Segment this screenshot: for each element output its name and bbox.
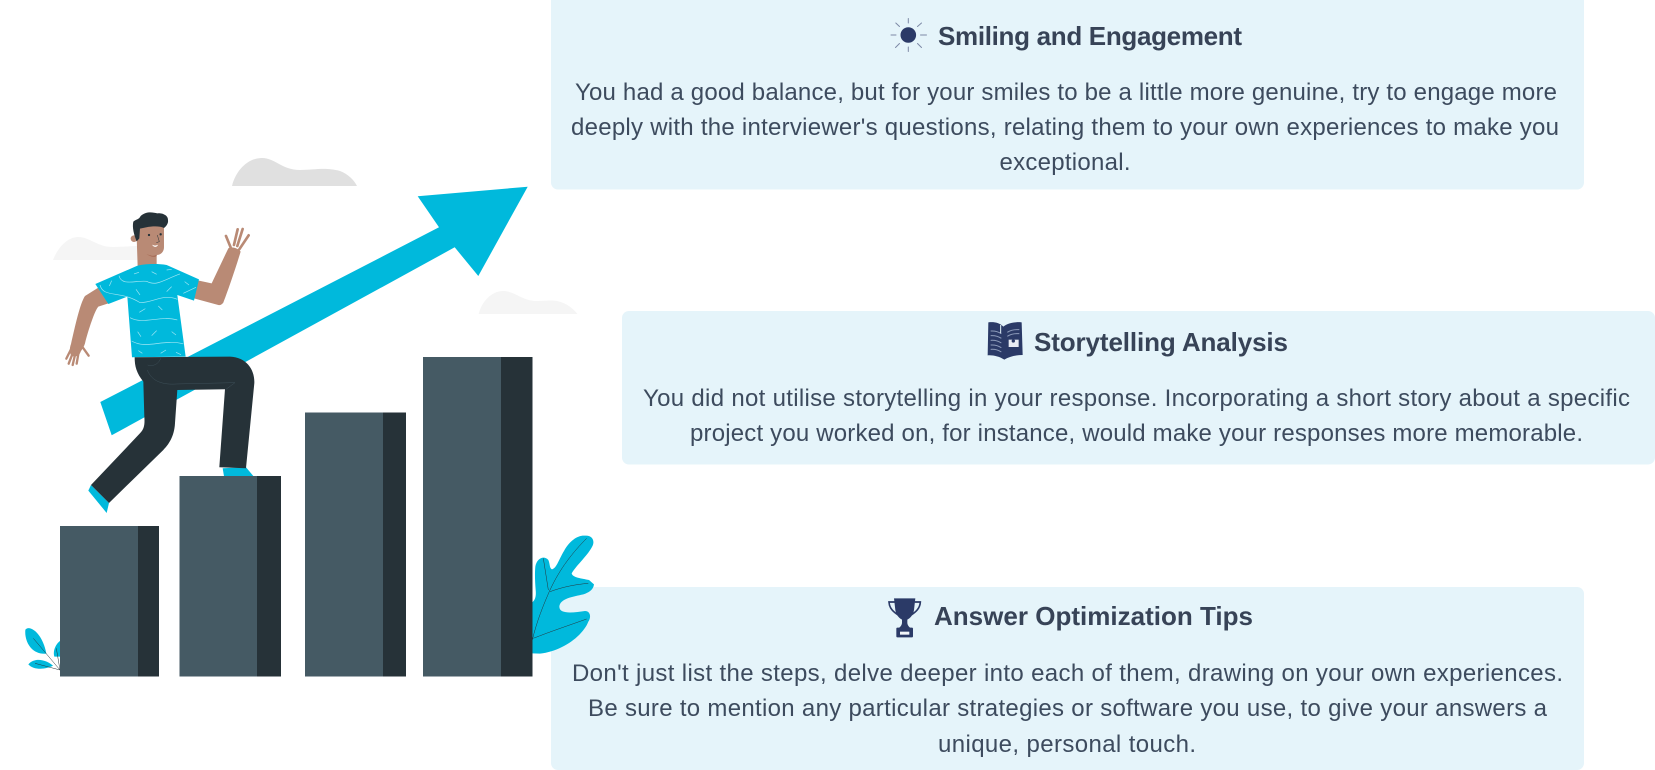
pants [91, 357, 254, 503]
heading: answer optimization tips: Answer Optimization Tips [934, 601, 1253, 631]
arm: left [66, 288, 108, 365]
text: answer optimization advice [572, 660, 1563, 758]
icon: sun [891, 18, 926, 52]
leaf: small left [25, 628, 63, 670]
bar: second [180, 476, 281, 676]
text: storytelling advice: project you worked on, for instance, would make your responses more memorable. [690, 420, 1583, 447]
bar: fourth [423, 357, 532, 676]
cloud: right [479, 291, 577, 314]
panel: storytelling analysis [622, 311, 1655, 464]
text: smiling and engagement advice [571, 79, 1559, 176]
panel: answer optimization tips [551, 587, 1584, 770]
face [148, 233, 162, 247]
text: smiling and engagement advice: You had a good balance, but for your smiles to be a little more genuine, try to engage more [575, 79, 1557, 106]
neck shadow [147, 254, 157, 257]
leaf: large right [532, 536, 594, 654]
cloud: top [232, 158, 357, 186]
shirt pattern [100, 269, 196, 355]
text: answer optimization advice: Don't just list the steps, delve deeper into each of them, drawing on your own experiences. [572, 660, 1563, 687]
text: answer optimization advice: unique, personal touch. [938, 731, 1196, 758]
icon: open book [988, 322, 1023, 360]
text: storytelling advice: You did not utilise storytelling in your response. Incorporating a short story about a specific [643, 385, 1630, 412]
heading: smiling and engagement: Smiling and Engagement [938, 21, 1242, 51]
arrow: rising growth [100, 187, 528, 435]
person [66, 212, 254, 513]
shoe: back [88, 485, 109, 513]
head and neck [137, 225, 164, 267]
text: storytelling advice [643, 385, 1630, 447]
cloud: left [53, 237, 140, 260]
text: smiling and engagement advice: deeply with the interviewer's questions, relating them to your own experiences to make you [571, 114, 1559, 141]
pants seam [147, 358, 235, 389]
text: smiling and engagement advice: exceptional. [1000, 149, 1130, 176]
shoe: front [223, 467, 253, 476]
bar: third [305, 412, 406, 676]
text: answer optimization advice: Be sure to mention any particular strategies or software you use, to give your answers a [588, 695, 1548, 722]
hair [133, 212, 168, 241]
shirt [95, 264, 199, 357]
heading: storytelling analysis: Storytelling Analysis [1034, 327, 1288, 357]
arm: right [194, 229, 249, 305]
icon: trophy [889, 598, 920, 637]
illustration: person climbing bar chart [25, 158, 594, 676]
panel: smiling and engagement [551, 0, 1584, 190]
bar: first [60, 526, 159, 676]
